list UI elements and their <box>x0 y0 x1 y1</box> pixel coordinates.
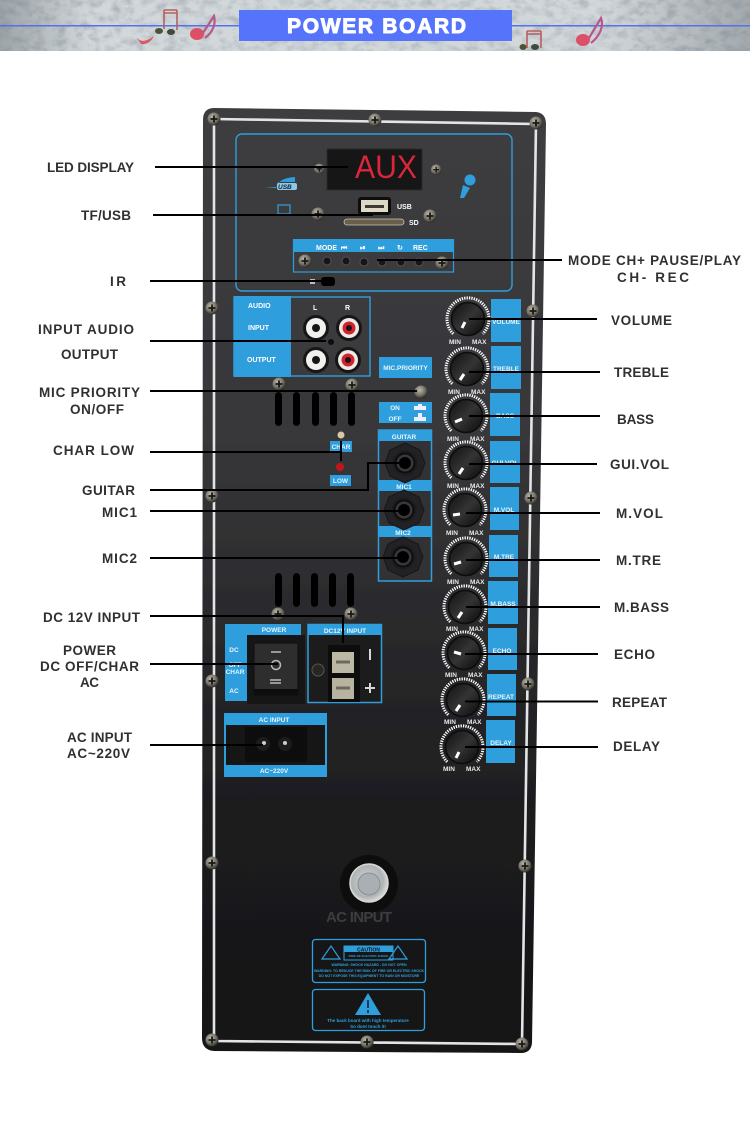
panel: guitar and mic jacks: MIC2 <box>395 530 411 537</box>
knob: m.tre: MAX <box>470 579 485 586</box>
icon: SD card <box>278 205 290 214</box>
on off label: OFF <box>388 416 402 423</box>
callout: mic2: MIC2 <box>102 551 137 566</box>
mic priority switch <box>414 386 428 398</box>
panel: power switch: OFF <box>228 662 242 669</box>
callout: input audio output: INPUT AUDIO <box>38 322 134 337</box>
panel: power board faceplate <box>202 108 546 1053</box>
SD slot: SD <box>409 220 419 227</box>
SD slot <box>344 219 419 227</box>
callout: IR: IR <box>110 274 126 289</box>
callout: power <box>40 643 278 690</box>
charge indicators <box>330 432 352 486</box>
panel: audio input output: AUDIO <box>248 303 271 310</box>
knob: m.tre: MIN <box>447 579 459 586</box>
knob: m.bass: MAX <box>469 626 484 633</box>
USB port <box>358 197 412 215</box>
button strip: ↻ <box>397 245 403 252</box>
callout: DC 12V input <box>43 610 343 643</box>
knob: m.tre <box>445 538 487 586</box>
panel: hot surface warning <box>312 990 424 1030</box>
knob labels: BASS <box>496 413 515 420</box>
callout: mic priority: ON/OFF <box>70 402 124 417</box>
panel: guitar and mic jacks: GUITAR <box>392 434 417 441</box>
icon: USB logo: USB <box>278 184 292 191</box>
panel: power switch: AC <box>229 688 239 695</box>
icon: music notes right <box>520 18 602 50</box>
USB port: USB <box>397 204 412 211</box>
panel: caution box: RISK OF ELECTRIC SHOCK <box>349 954 389 958</box>
knob: treble: MAX <box>471 389 486 396</box>
callout: m.vol: M.VOL <box>616 506 663 521</box>
knob: gui.vol: MIN <box>447 483 459 490</box>
callout: guitar: GUITAR <box>82 483 135 498</box>
panel: caution box <box>312 940 426 982</box>
knob labels: M.VOL <box>494 507 514 514</box>
callout: guitar <box>82 463 400 498</box>
callout: m.tre: M.TRE <box>616 553 661 568</box>
button strip: ⏮ <box>341 245 348 252</box>
callout: input audio output: OUTPUT <box>61 347 119 362</box>
grommet terminal <box>340 855 398 913</box>
knob: delay: MIN <box>443 766 455 773</box>
knob labels: VOLUME <box>492 319 521 326</box>
callout: mic priority <box>39 385 417 417</box>
panel: DC 12V input: DC12V INPUT <box>324 628 366 635</box>
icon: music notes left <box>136 10 215 44</box>
callout: bass: BASS <box>617 412 654 427</box>
callout: power: DC OFF/CHAR <box>40 659 139 674</box>
knob: gui.vol: MAX <box>470 483 485 490</box>
knob: volume: MIN <box>449 339 461 346</box>
display and USB screws <box>312 164 441 222</box>
vents lower <box>275 573 354 607</box>
callout: volume: VOLUME <box>611 313 672 328</box>
panel: AC input: AC~220V <box>260 768 289 775</box>
callout: AC input <box>67 730 263 761</box>
icon: microphone <box>460 174 476 198</box>
panel: AC input: AC INPUT <box>259 717 289 724</box>
button strip: MODE <box>316 245 337 252</box>
knob: echo: MIN <box>445 672 457 679</box>
knob: echo <box>443 632 485 679</box>
callout: TF/USB: TF/USB <box>81 208 131 223</box>
panel: caution box: WARNING: SHOCK HAZARD - DO NOT OPEN <box>331 963 407 967</box>
panel: DC 12V input <box>308 624 382 702</box>
callout: LED display: LED DISPLAY <box>47 160 134 175</box>
callout: repeat: REPEAT <box>612 695 668 710</box>
callout: AC input: AC INPUT <box>67 730 133 745</box>
panel: audio input output: L <box>313 305 318 312</box>
vents upper <box>275 392 355 426</box>
callout: char low: CHAR LOW <box>53 443 134 458</box>
knob labels: M.TRE <box>494 554 515 561</box>
panel: caution box: DO NOT EXPOSE THIS EQUIPMENT TO RAIN OR MOISTURE <box>319 974 420 978</box>
title banner: POWER BOARD <box>287 15 466 38</box>
panel: power switch: DC <box>229 647 239 654</box>
knob labels: TREBLE <box>493 366 520 373</box>
knob: repeat <box>442 679 484 726</box>
button strip: ⏭ <box>378 245 385 252</box>
knob labels <box>486 299 521 763</box>
knob: volume <box>447 298 489 346</box>
knob: m.bass <box>444 586 486 633</box>
panel: audio input output <box>234 296 370 377</box>
panel: caution box: CAUTION <box>357 948 380 954</box>
knob: repeat: MIN <box>444 719 456 726</box>
charge indicators: LOW <box>333 478 349 485</box>
on off label <box>379 402 432 423</box>
knob labels: DELAY <box>490 740 512 747</box>
callout: delay: DELAY <box>613 739 660 754</box>
callout: input audio output <box>38 322 326 362</box>
knob: bass <box>445 395 487 443</box>
mic priority label <box>379 357 432 378</box>
knob: treble <box>446 348 488 396</box>
screws below lower vents <box>272 608 358 620</box>
callout: mic priority: MIC PRIORITY <box>39 385 140 400</box>
knob: volume: MAX <box>472 339 487 346</box>
panel: audio input output: INPUT <box>248 325 270 332</box>
IR receiver <box>310 277 335 286</box>
callout: mic1: MIC1 <box>102 505 137 520</box>
panel: audio input output: OUTPUT <box>247 357 276 364</box>
callout: treble: TREBLE <box>614 365 669 380</box>
knob: m.vol <box>444 489 486 537</box>
knob: delay <box>441 726 483 773</box>
knob labels: REPEAT <box>488 694 514 701</box>
knob: m.vol: MIN <box>446 530 458 537</box>
knob: bass: MIN <box>447 436 459 443</box>
knob: m.vol: MAX <box>469 530 484 537</box>
knob: bass: MAX <box>470 436 485 443</box>
knob: gui.vol <box>445 442 487 490</box>
charge indicators: CHAR <box>332 444 351 451</box>
on off label: ON <box>390 405 400 412</box>
knob: m.bass: MIN <box>446 626 458 633</box>
panel: media player <box>236 134 512 291</box>
panel: audio input output: R <box>345 305 350 312</box>
knob: delay: MAX <box>466 766 481 773</box>
panel: guitar and mic jacks <box>378 430 432 581</box>
panel: power switch <box>225 624 305 704</box>
callout: mode buttons: MODE CH+ PAUSE/PLAY <box>568 253 741 268</box>
LED display <box>327 149 422 190</box>
callout: mode buttons <box>377 253 741 285</box>
callout: echo: ECHO <box>614 647 655 662</box>
callout: power: AC <box>80 675 99 690</box>
callout: power: POWER <box>63 643 116 658</box>
knob: treble: MIN <box>448 389 460 396</box>
panel: caution box: WARNING: TO REDUCE THE RISK OF FIRE OR ELECTRIC SHOCK <box>314 969 424 973</box>
knob: repeat: MAX <box>467 719 482 726</box>
callout: mode buttons: CH- REC <box>617 270 689 285</box>
panel: hot surface warning: The back board with high temperature <box>327 1018 409 1023</box>
callout: DC 12V input: DC 12V INPUT <box>43 610 141 625</box>
embossed text: AC INPUT <box>326 909 392 926</box>
panel: guitar and mic jacks: MIC1 <box>396 484 412 491</box>
panel: power switch: POWER <box>262 627 287 634</box>
screws above upper vents <box>272 378 358 392</box>
knob labels: ECHO <box>493 648 511 655</box>
button strip: REC <box>413 245 428 252</box>
callout: char low <box>53 441 341 461</box>
callout: gui.vol: GUI.VOL <box>610 457 669 472</box>
panel: power switch: CHAR <box>226 669 245 676</box>
callout: AC input: AC~220V <box>67 746 130 761</box>
mic priority label: MIC.PRIORITY <box>383 365 428 372</box>
title banner <box>239 10 512 41</box>
button strip: ⏯ <box>360 245 366 252</box>
knob labels: M.BASS <box>490 601 516 608</box>
screws <box>206 112 542 1050</box>
panel: AC input <box>224 713 327 777</box>
icon: USB logo <box>265 177 297 191</box>
callout: m.bass: M.BASS <box>614 600 669 615</box>
knob labels: GUI.VOL <box>492 460 518 467</box>
knob: echo: MAX <box>468 672 483 679</box>
button strip <box>293 239 454 272</box>
header band <box>0 0 750 51</box>
panel: hot surface warning: So dont touch it! <box>350 1024 386 1029</box>
LED display: AUX <box>355 149 417 185</box>
